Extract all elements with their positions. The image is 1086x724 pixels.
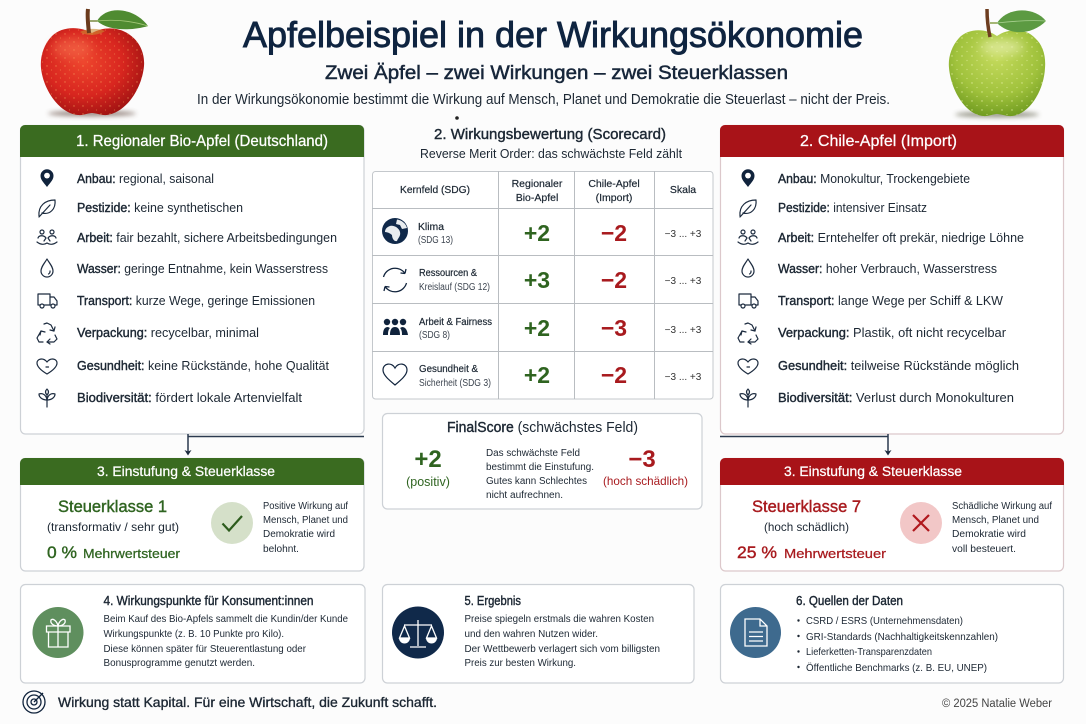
row: Anbau: Anbau: Monokultur, Trockengebiete: [778, 171, 970, 186]
score: positive: (positiv): [406, 475, 450, 489]
row: Pestizide: Pestizide: intensiver Einsatz: [778, 200, 927, 215]
icon: check mark: [211, 502, 253, 544]
icon: red apple: [41, 9, 148, 116]
table header row: Skala: [670, 184, 696, 196]
row: Arbeit und Fairness: (SDG 8): [419, 330, 450, 341]
bullet list: Lieferketten-Transparenzdaten: [806, 646, 932, 658]
explanation text: [263, 501, 348, 555]
body text: Preis zur besten Wirkung.: [464, 657, 576, 669]
FinalScore heading: FinalScore (schwächstes Feld): [447, 420, 638, 436]
icon: heart: [383, 364, 407, 385]
row: Transport: Transport: kurze Wege, geringe Emissionen: [77, 293, 315, 308]
explanation text: belohnt.: [263, 544, 299, 555]
body text: und den wahren Nutzen wider.: [464, 628, 598, 640]
row: Ressourcen: −3 ... +3: [665, 276, 702, 287]
icon: scales: [392, 606, 444, 658]
tax class text: Mehrwertsteuer: [784, 546, 887, 561]
table header row: Chile-Apfel: [588, 178, 640, 190]
body text: Preise spiegeln erstmals die wahren Kosten: [464, 613, 654, 625]
tax class text: 0 %: [47, 543, 77, 562]
body text: Wirkungspunkte (z. B. 10 Punkte pro Kilo).: [104, 628, 284, 640]
explanation text: Gutes kann Schlechtes: [486, 476, 587, 487]
scorecard heading: Reverse Merit Order: das schwächste Feld zählt: [420, 146, 682, 161]
row: Gesundheit und Sicherheit: [383, 362, 702, 389]
explanation text: bestimmt die Einstufung.: [486, 462, 594, 473]
explanation text: Schädliche Wirkung auf: [952, 501, 1052, 512]
row: Ressourcen: [384, 267, 702, 293]
scorecard heading: 2. Wirkungsbewertung (Scorecard): [434, 126, 666, 143]
row: Verpackung: Verpackung: Plastik, oft nicht recycelbar: [778, 325, 1007, 340]
score: positive: [406, 446, 450, 489]
icon: leaf: [39, 200, 55, 217]
heading: 5. Ergebnis: [464, 594, 521, 608]
bullet list: [797, 615, 998, 674]
icon: people: [37, 230, 57, 244]
row: Gesundheit und Sicherheit: −2: [601, 362, 627, 388]
score: positive: +2: [414, 446, 442, 473]
icon: gift: [32, 607, 84, 658]
panel: Chile-Apfel: [720, 125, 1064, 434]
row: Gesundheit: Gesundheit: keine Rückstände, hohe Qualität: [77, 358, 329, 373]
body text: Der Wettbewerb verlagert sich vom billigsten: [464, 643, 660, 655]
icon: cross: [900, 502, 942, 544]
bullet list: GRI-Standards (Nachhaltigkeitskennzahlen): [806, 631, 998, 643]
icon: heart: [37, 359, 57, 374]
row: Arbeit und Fairness: −3 ... +3: [665, 325, 702, 336]
icon: water drop: [742, 259, 754, 277]
table header row: Regionaler: [512, 178, 563, 190]
explanation text: Positive Wirkung auf: [263, 501, 348, 512]
footer slogan: Wirkung statt Kapital. Für eine Wirtschaft, die Zukunft schafft.: [58, 694, 437, 710]
icon: sprout: [39, 389, 55, 407]
row: Verpackung: Verpackung: recycelbar, minimal: [77, 325, 259, 340]
bullet list: CSRD / ESRS (Unternehmensdaten): [806, 615, 963, 627]
explanation text: voll besteuert.: [952, 544, 1016, 555]
score: negative: (hoch schädlich): [603, 474, 688, 488]
row: Arbeit und Fairness: +2: [524, 315, 550, 341]
table header row: Bio-Apfel: [516, 192, 558, 204]
row: Pestizide: Pestizide: keine synthetischen: [77, 200, 243, 215]
body text: Bonusprogramme genutzt werden.: [104, 657, 255, 669]
icon: recycling: [37, 323, 57, 344]
row: Klima: −3 ... +3: [665, 229, 702, 240]
row: Arbeit und Fairness: Arbeit & Fairness: [419, 317, 492, 328]
row: Gesundheit und Sicherheit: Sicherheit (SDG 3): [419, 378, 491, 389]
explanation text: [952, 501, 1052, 555]
tax class text: 25 %: [737, 543, 777, 562]
row: Gesundheit und Sicherheit: −3 ... +3: [665, 372, 702, 383]
row: Klima: (SDG 13): [418, 235, 453, 246]
row: Klima: +2: [524, 220, 550, 246]
row: Biodiversität: Biodiversität: fördert lokale Artenvielfalt: [77, 390, 302, 405]
row: Arbeit: Arbeit: fair bezahlt, sichere Arbeitsbedingungen: [77, 230, 337, 245]
panel: Ergebnis: [382, 584, 694, 683]
body text: [104, 613, 348, 669]
scorecard table: [372, 171, 713, 399]
explanation text: [486, 448, 594, 501]
subtitle: Zwei Äpfel – zwei Wirkungen – zwei Steuerklassen: [325, 62, 788, 84]
intro text: In der Wirkungsökonomie bestimmt die Wirkung auf Mensch, Planet und Demokratie die Steuerlast – nicht der Preis.: [197, 92, 890, 108]
panel: Steuerklasse 7: [720, 458, 1064, 571]
panel: Quellen: [720, 584, 1064, 683]
row: Anbau: Anbau: regional, saisonal: [77, 171, 214, 186]
table header row: [400, 178, 696, 204]
explanation text: nicht aufrechnen.: [486, 490, 563, 501]
explanation text: Demokratie wird: [952, 529, 1026, 540]
row: Wasser: Wasser: geringe Entnahme, kein Wasserstress: [77, 261, 328, 276]
explanation text: Mensch, Planet und: [263, 515, 348, 526]
tax class text: Steuerklasse 1: [58, 498, 167, 516]
tax class text: (transformativ / sehr gut): [47, 520, 179, 534]
copyright: © 2025 Natalie Weber: [942, 698, 1052, 710]
panel header: [20, 458, 364, 485]
panel header: Bio-Apfel: [20, 125, 364, 157]
panel header: 3. Einstufung & Steuerklasse: [784, 464, 962, 479]
arrow: left connector: [184, 434, 364, 456]
title: Apfelbeispiel in der Wirkungsökonomie: [243, 14, 863, 55]
panel header: Chile-Apfel: [720, 125, 1064, 157]
explanation text: Demokratie wird: [263, 529, 335, 540]
tax class text: (hoch schädlich): [764, 520, 849, 534]
row: Arbeit: Arbeit: Erntehelfer oft prekär, niedrige Löhne: [778, 230, 1024, 245]
table header row: Kernfeld (SDG): [400, 184, 470, 196]
icon: location: [40, 169, 54, 187]
icon: truck: [739, 294, 758, 308]
row: Ressourcen: −2: [601, 267, 627, 293]
table header row: (Import): [596, 192, 632, 204]
heading: 6. Quellen der Daten: [796, 594, 903, 608]
row: Gesundheit und Sicherheit: Gesundheit &: [419, 364, 478, 375]
arrow: right connector: [720, 434, 892, 456]
panel: regionaler Bio-Apfel: [20, 125, 364, 434]
row: Klima: [382, 218, 702, 246]
icon: cycle arrows: [384, 268, 406, 292]
tax class text: Steuerklasse 7: [752, 498, 861, 516]
tax class text: [737, 498, 887, 562]
score: negative: [603, 446, 688, 488]
panel header: [720, 458, 1064, 485]
icon: people: [738, 230, 758, 244]
icon: water drop: [41, 259, 53, 277]
icon: document: [730, 607, 781, 658]
tax class text: Mehrwertsteuer: [83, 546, 181, 561]
icon: leaf: [740, 200, 756, 217]
scorecard heading: [420, 126, 682, 161]
icon: globe: [382, 218, 408, 244]
icon: heart: [738, 359, 758, 374]
row: Arbeit und Fairness: −3: [601, 315, 627, 341]
body text: Diese können später für Steuerentlastung oder: [104, 643, 306, 655]
panel header: 3. Einstufung & Steuerklasse: [97, 464, 275, 479]
panel header: Bio-Apfel: 1. Regionaler Bio-Apfel (Deutschland): [76, 133, 328, 150]
tax class text: [47, 498, 181, 562]
row: Gesundheit und Sicherheit: +2: [524, 362, 550, 388]
body text: Beim Kauf des Bio-Apfels sammelt die Kundin/der Kunde: [104, 613, 348, 625]
row: Klima: Klima: [418, 222, 444, 233]
icon: sprout: [740, 389, 756, 407]
bullet list: Öffentliche Benchmarks (z. B. EU, UNEP): [806, 662, 987, 674]
row: Gesundheit: Gesundheit: teilweise Rückstände möglich: [778, 358, 1019, 373]
body text: [464, 613, 660, 669]
icon: target: [23, 691, 45, 713]
row: Transport: Transport: lange Wege per Schiff & LKW: [778, 293, 1004, 308]
icon: location: [742, 169, 754, 187]
row: Klima: −2: [601, 220, 627, 246]
explanation text: Mensch, Planet und: [952, 515, 1039, 526]
row: Ressourcen: Kreislauf (SDG 12): [419, 282, 490, 293]
row: Ressourcen: +3: [524, 267, 550, 293]
row: Biodiversität: Biodiversität: Verlust durch Monokulturen: [778, 390, 1014, 405]
icon: recycling: [738, 323, 758, 344]
heading: 4. Wirkungspunkte für Konsument:innen: [104, 594, 314, 608]
icon: group of people: [383, 319, 408, 335]
panel header: Chile-Apfel: 2. Chile-Apfel (Import): [800, 133, 957, 150]
icon: green apple: [949, 9, 1046, 118]
score: negative: −3: [628, 446, 656, 473]
row: Ressourcen: Ressourcen &: [419, 268, 477, 279]
panel: FinalScore: [382, 414, 702, 509]
row: Wasser: Wasser: hoher Verbrauch, Wasserstress: [778, 261, 997, 276]
panel: Steuerklasse 1: [20, 458, 364, 571]
panel: Wirkungspunkte: [20, 584, 365, 683]
row: Arbeit und Fairness: [383, 315, 702, 341]
explanation text: Das schwächste Feld: [486, 448, 580, 459]
icon: truck: [38, 294, 57, 308]
